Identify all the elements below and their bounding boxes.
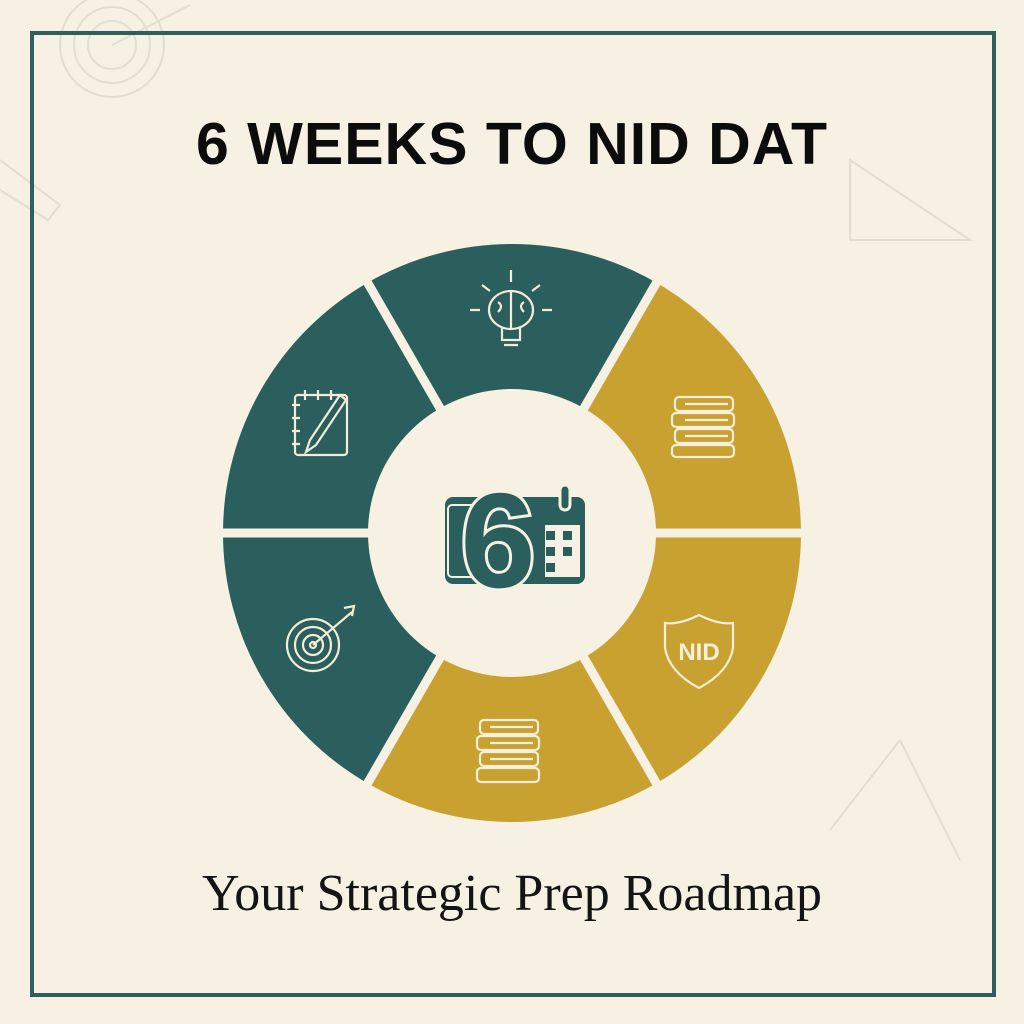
segment: top teal xyxy=(368,244,656,412)
segment: left lower teal xyxy=(223,533,442,783)
icon: books bottom xyxy=(477,720,539,782)
segment: left upper teal xyxy=(223,283,442,533)
title: 6 WEEKS TO NID DAT xyxy=(196,111,828,177)
segment: right upper gold xyxy=(582,283,801,533)
icon: notepad pencil xyxy=(292,390,347,455)
segment: right lower gold xyxy=(582,533,801,783)
subtitle: Your Strategic Prep Roadmap xyxy=(202,865,822,922)
icon: brain lightbulb xyxy=(470,270,552,345)
icon: NID shield xyxy=(665,615,733,688)
segment: bottom gold xyxy=(368,654,656,822)
icon: center calendar with 6: 6 xyxy=(460,465,536,616)
icon: books top right xyxy=(672,397,734,457)
icon: center calendar with 6 xyxy=(445,465,585,616)
icon: NID shield: NID xyxy=(678,639,720,666)
icon: target xyxy=(287,606,354,671)
